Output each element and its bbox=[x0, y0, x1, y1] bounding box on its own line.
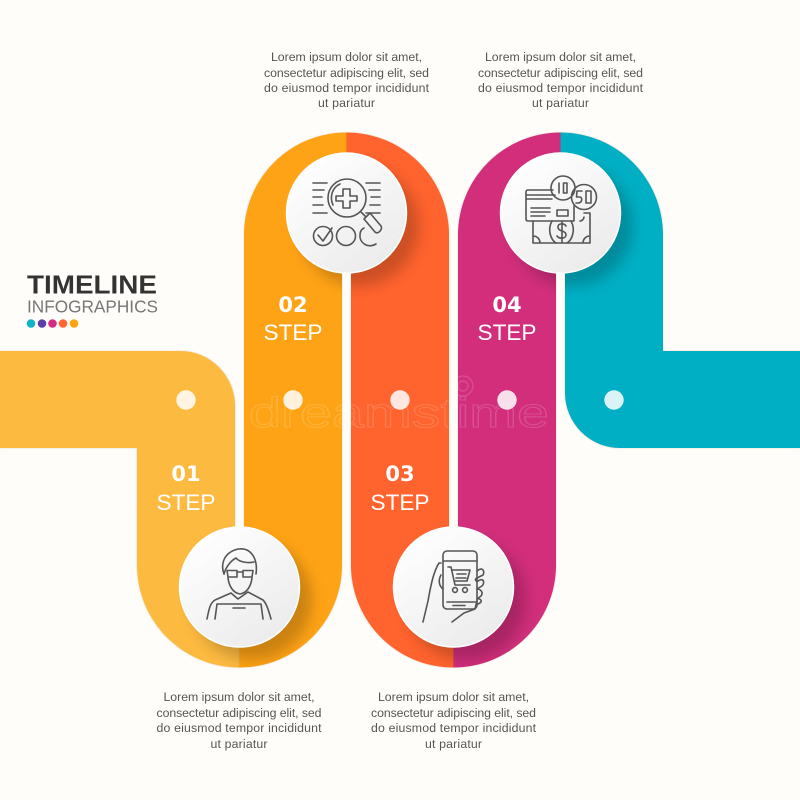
step 04 label: STEP bbox=[478, 320, 536, 345]
step 01 label bbox=[156, 462, 216, 515]
text block: step 02: ut pariatur bbox=[318, 96, 375, 110]
step 03 label: 03 bbox=[385, 462, 415, 486]
text block: step 02: Lorem ipsum dolor sit amet, bbox=[271, 50, 422, 64]
step 04 label: 04 bbox=[492, 293, 522, 317]
step 02 label: 02 bbox=[278, 293, 308, 317]
text block: step 03: ut pariatur bbox=[425, 737, 482, 751]
step 01 icon badge: person with laptop bbox=[180, 527, 300, 647]
segment 5 teal bbox=[560, 132, 800, 448]
segment 2 amber bbox=[240, 132, 346, 668]
text block: step 04: consectetur adipiscing elit, sed bbox=[478, 66, 643, 80]
step 03 icon badge: phone with shopping cart in hand bbox=[394, 527, 514, 647]
timeline ribbon bbox=[0, 132, 800, 668]
circle shadows bbox=[192, 166, 633, 660]
text block: step 03: do eiusmod tempor incididunt bbox=[371, 721, 537, 735]
text block: step 01: do eiusmod tempor incididunt bbox=[156, 721, 322, 735]
title block bbox=[27, 270, 158, 328]
segment 3 orange bbox=[346, 132, 454, 668]
text block: step 04: do eiusmod tempor incididunt bbox=[478, 81, 644, 95]
step 01 label: STEP bbox=[156, 490, 216, 515]
segment 1 yellow bbox=[0, 351, 240, 668]
text block: step 03: Lorem ipsum dolor sit amet, bbox=[378, 690, 529, 704]
step 04 icon badge: card, coins and banknote bbox=[500, 153, 620, 273]
timeline markers bbox=[176, 390, 624, 410]
title block: TIMELINE bbox=[27, 270, 157, 300]
text block: step 04: Lorem ipsum dolor sit amet, bbox=[485, 50, 636, 64]
step 04 label bbox=[478, 293, 536, 345]
text block: step 04: ut pariatur bbox=[532, 96, 589, 110]
text block: step 04 bbox=[478, 50, 644, 110]
step 02 label bbox=[264, 293, 322, 345]
text block: step 01 bbox=[156, 690, 322, 751]
text block: step 03: consectetur adipiscing elit, sed bbox=[371, 706, 536, 720]
step 02 label: STEP bbox=[264, 320, 322, 345]
step 03 label: STEP bbox=[370, 490, 430, 515]
step 02 icon badge: magnifier and checklist bbox=[286, 153, 406, 273]
text block: step 02: consectetur adipiscing elit, sed bbox=[264, 66, 429, 80]
text block: step 02 bbox=[264, 50, 430, 110]
text block: step 01: Lorem ipsum dolor sit amet, bbox=[164, 690, 314, 704]
watermark: dreamstime bbox=[249, 389, 549, 436]
text block: step 01: ut pariatur bbox=[210, 737, 268, 751]
step 01 label: 01 bbox=[171, 462, 201, 486]
text block: step 01: consectetur adipiscing elit, sed bbox=[156, 706, 322, 720]
step 03 label bbox=[370, 462, 430, 515]
segment 4 magenta bbox=[454, 132, 560, 668]
watermark bbox=[249, 376, 549, 436]
text block: step 02: do eiusmod tempor incididunt bbox=[264, 81, 430, 95]
title block: INFOGRAPHICS bbox=[27, 296, 158, 316]
text block: step 03 bbox=[371, 690, 537, 751]
